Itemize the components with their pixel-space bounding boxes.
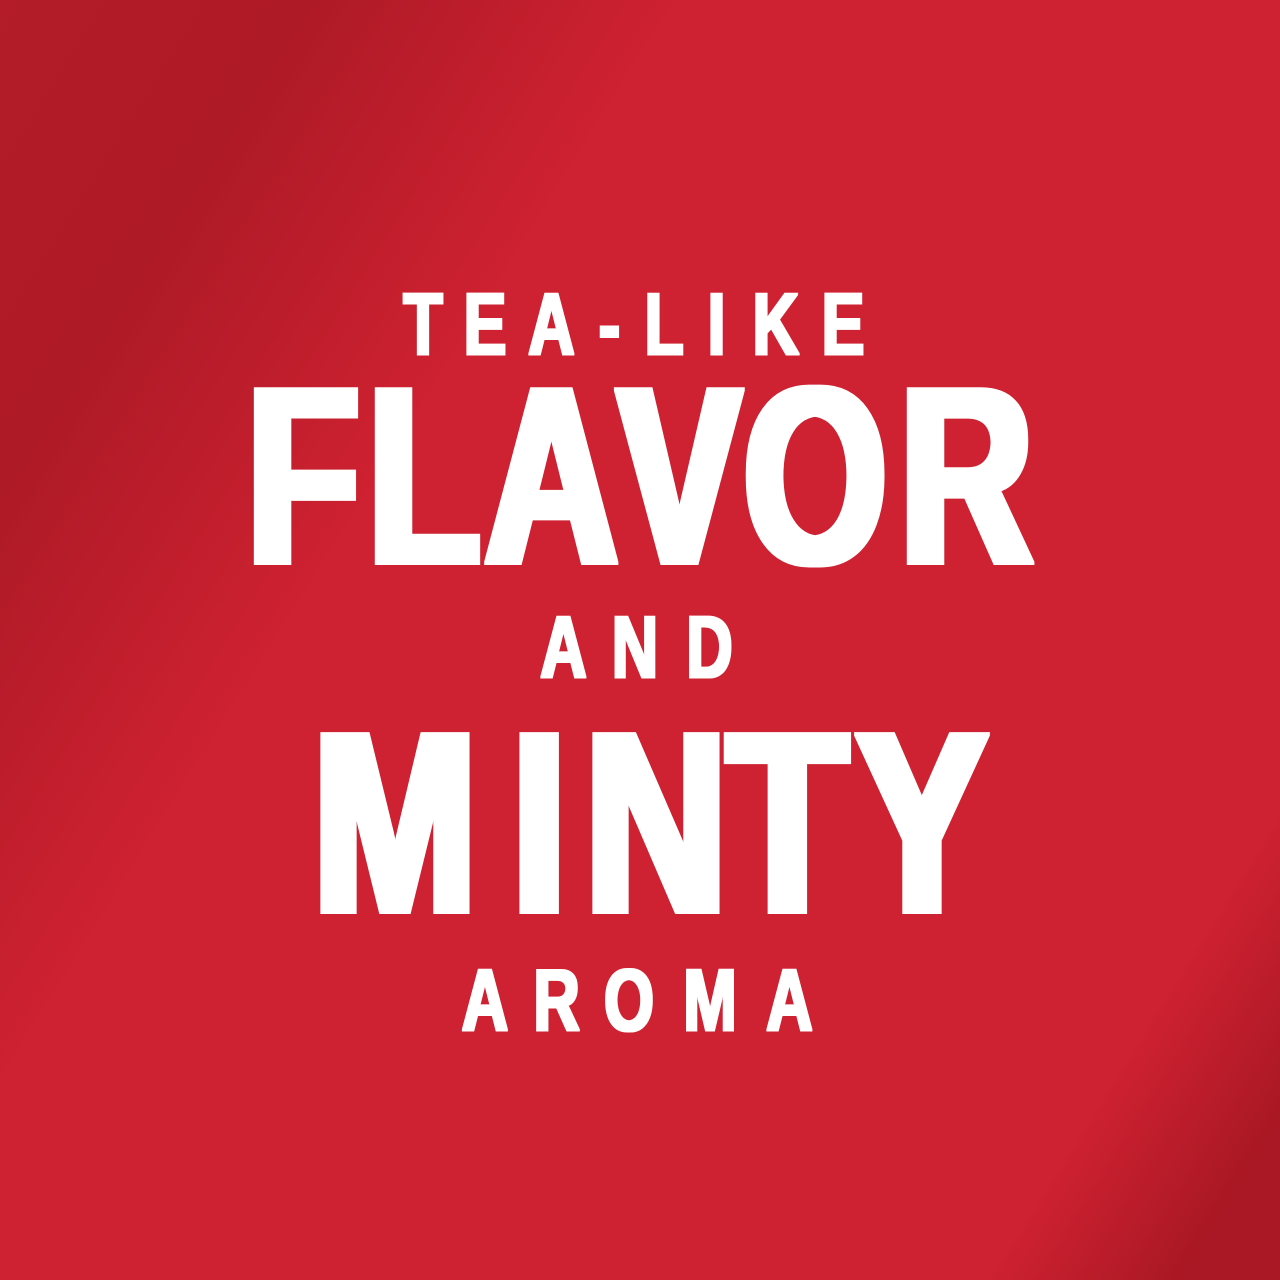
text: AND: AND xyxy=(540,598,733,697)
text: TEA-LIKE: TEA-LIKE xyxy=(403,275,864,374)
text: AROMA: AROMA xyxy=(462,951,813,1050)
heading: MINTY: MINTY xyxy=(313,677,988,968)
heading: FLAVOR: FLAVOR xyxy=(247,333,1033,617)
